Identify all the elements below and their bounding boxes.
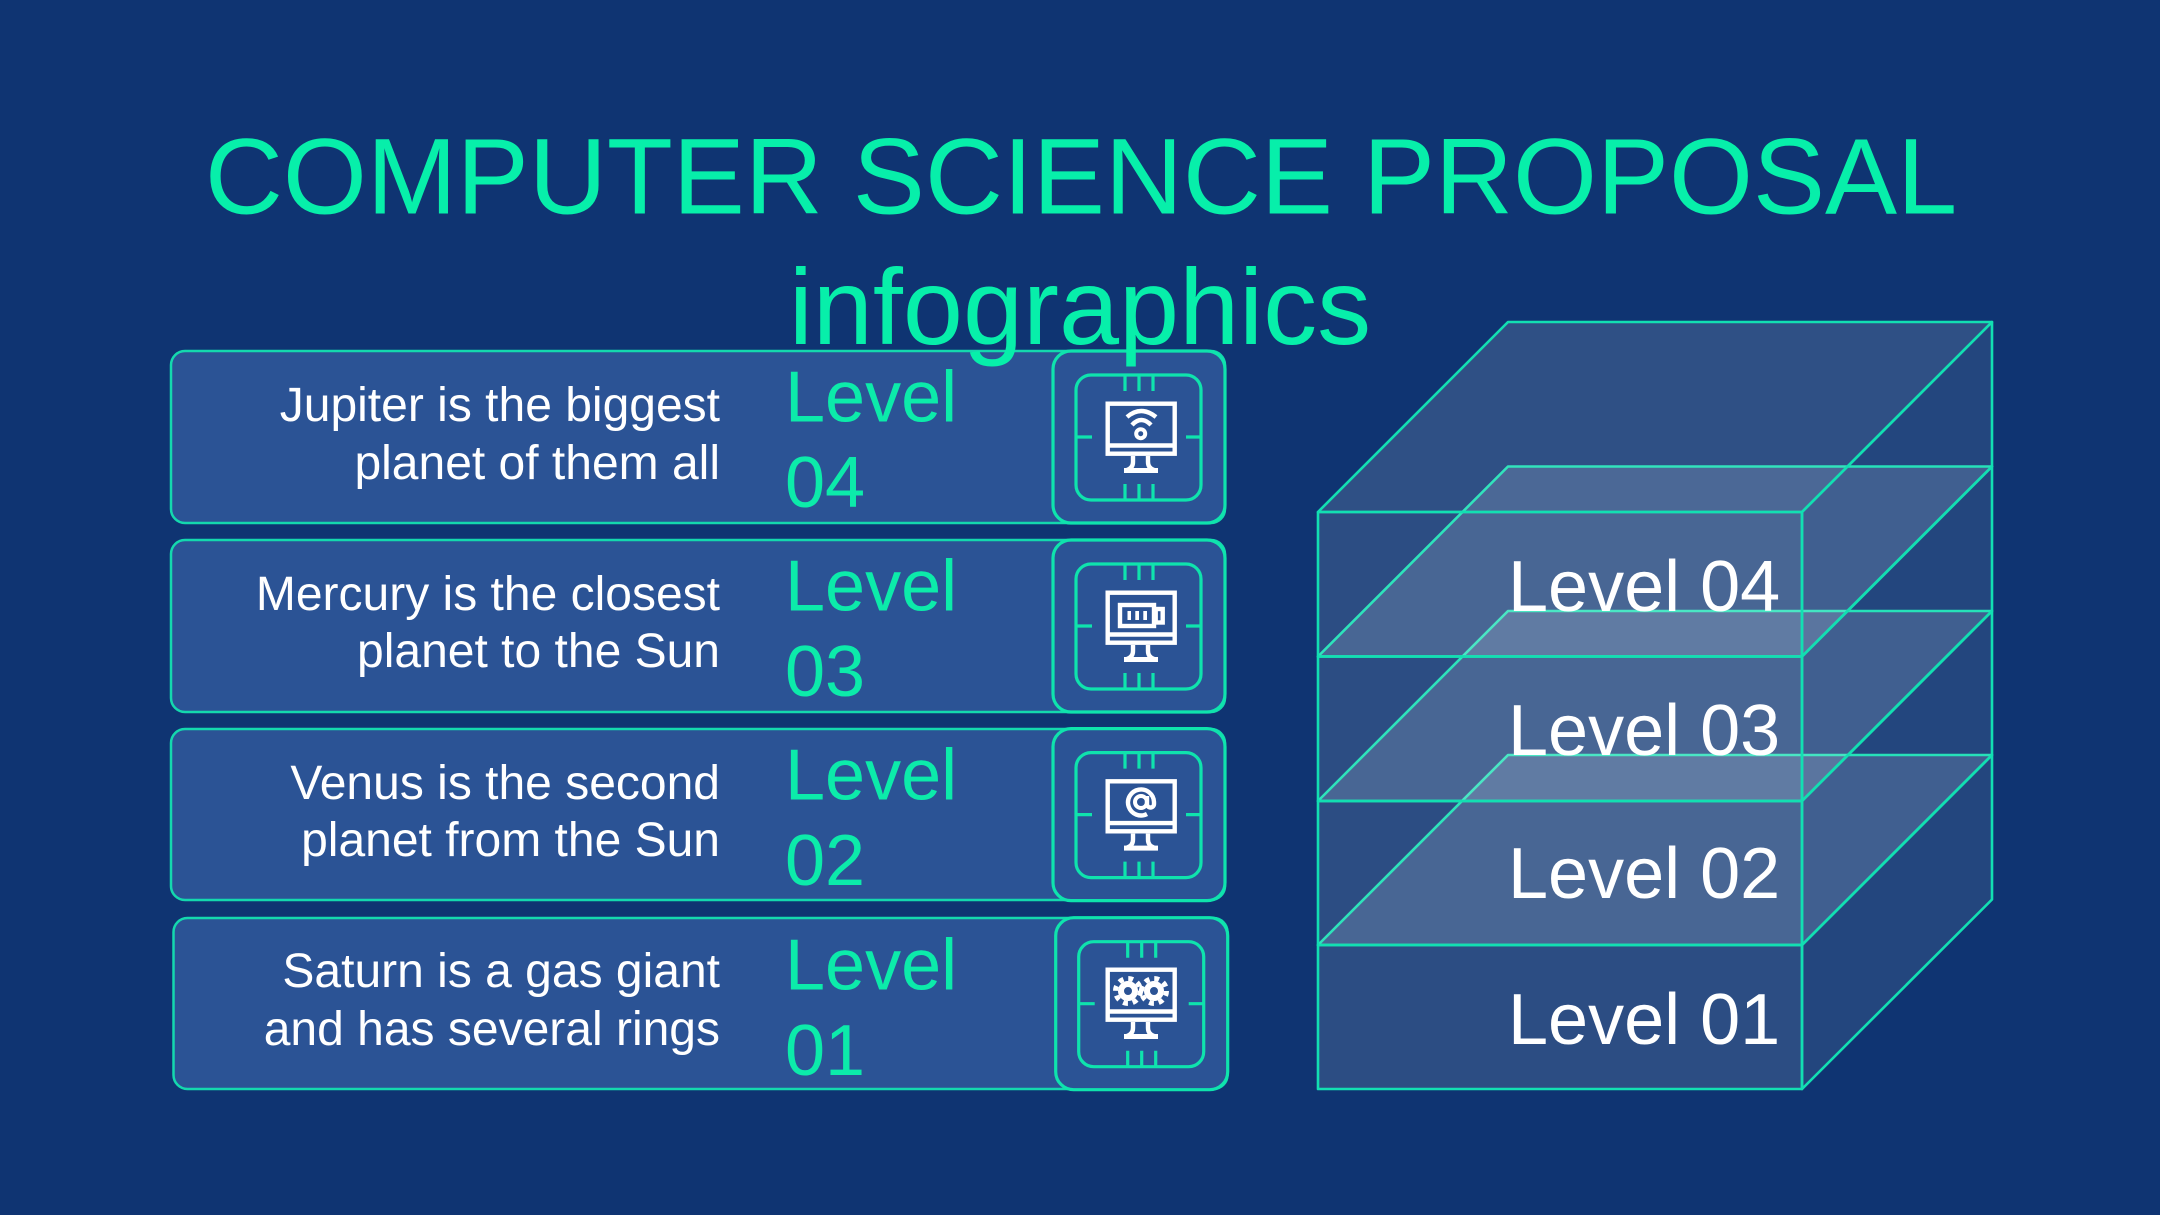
row background xyxy=(174,918,1228,1089)
layer: level 03 box xyxy=(1318,466,1992,801)
icon: monitor with at sign xyxy=(1053,729,1225,901)
icon: monitor with gears xyxy=(1056,918,1228,1090)
icon: monitor with wifi xyxy=(1053,351,1225,523)
label: Level 02: Level xyxy=(785,736,957,816)
description: Mercury: planet to the Sun xyxy=(357,625,720,678)
layer: level 02 box xyxy=(1318,611,1992,945)
description: Venus: Venus is the second xyxy=(290,757,720,810)
description: Saturn: Saturn is a gas giant xyxy=(282,945,720,998)
panel: level 04 row xyxy=(171,351,1225,523)
label: cube Level 02: Level 02 xyxy=(1508,834,1780,914)
label: Level 01: 01 xyxy=(785,1011,865,1091)
description: Mercury: Mercury is the closest xyxy=(256,568,720,621)
description: Jupiter: Jupiter is the biggest xyxy=(280,379,720,432)
icon: monitor with battery xyxy=(1053,540,1225,712)
layer: level 04 box xyxy=(1318,322,1992,656)
panel: level 02 row xyxy=(171,729,1225,901)
chart: stacked cube levels xyxy=(1318,322,1992,1089)
description: Venus: planet from the Sun xyxy=(301,814,720,867)
title: infographics xyxy=(789,246,1371,367)
description: Jupiter: planet of them all xyxy=(354,437,720,490)
label: Level 03: 03 xyxy=(785,632,865,712)
label: Level 04: 04 xyxy=(785,443,865,523)
label: Level 02: 02 xyxy=(785,821,865,901)
label: Level 01: Level xyxy=(785,926,957,1006)
row background xyxy=(171,729,1225,900)
label: Level 04: Level xyxy=(785,358,957,438)
row background xyxy=(171,351,1225,523)
panel: level 03 row xyxy=(171,540,1225,712)
panel: level 01 row xyxy=(174,918,1228,1091)
label: cube Level 04: Level 04 xyxy=(1508,547,1780,627)
row background xyxy=(171,540,1225,712)
label: cube Level 03: Level 03 xyxy=(1508,691,1780,771)
layer: level 01 box xyxy=(1318,755,1992,1089)
label: Level 03: Level xyxy=(785,546,957,626)
description: Saturn: and has several rings xyxy=(264,1003,720,1056)
title: COMPUTER SCIENCE PROPOSAL xyxy=(205,116,1957,236)
label: cube Level 01: Level 01 xyxy=(1508,980,1780,1060)
